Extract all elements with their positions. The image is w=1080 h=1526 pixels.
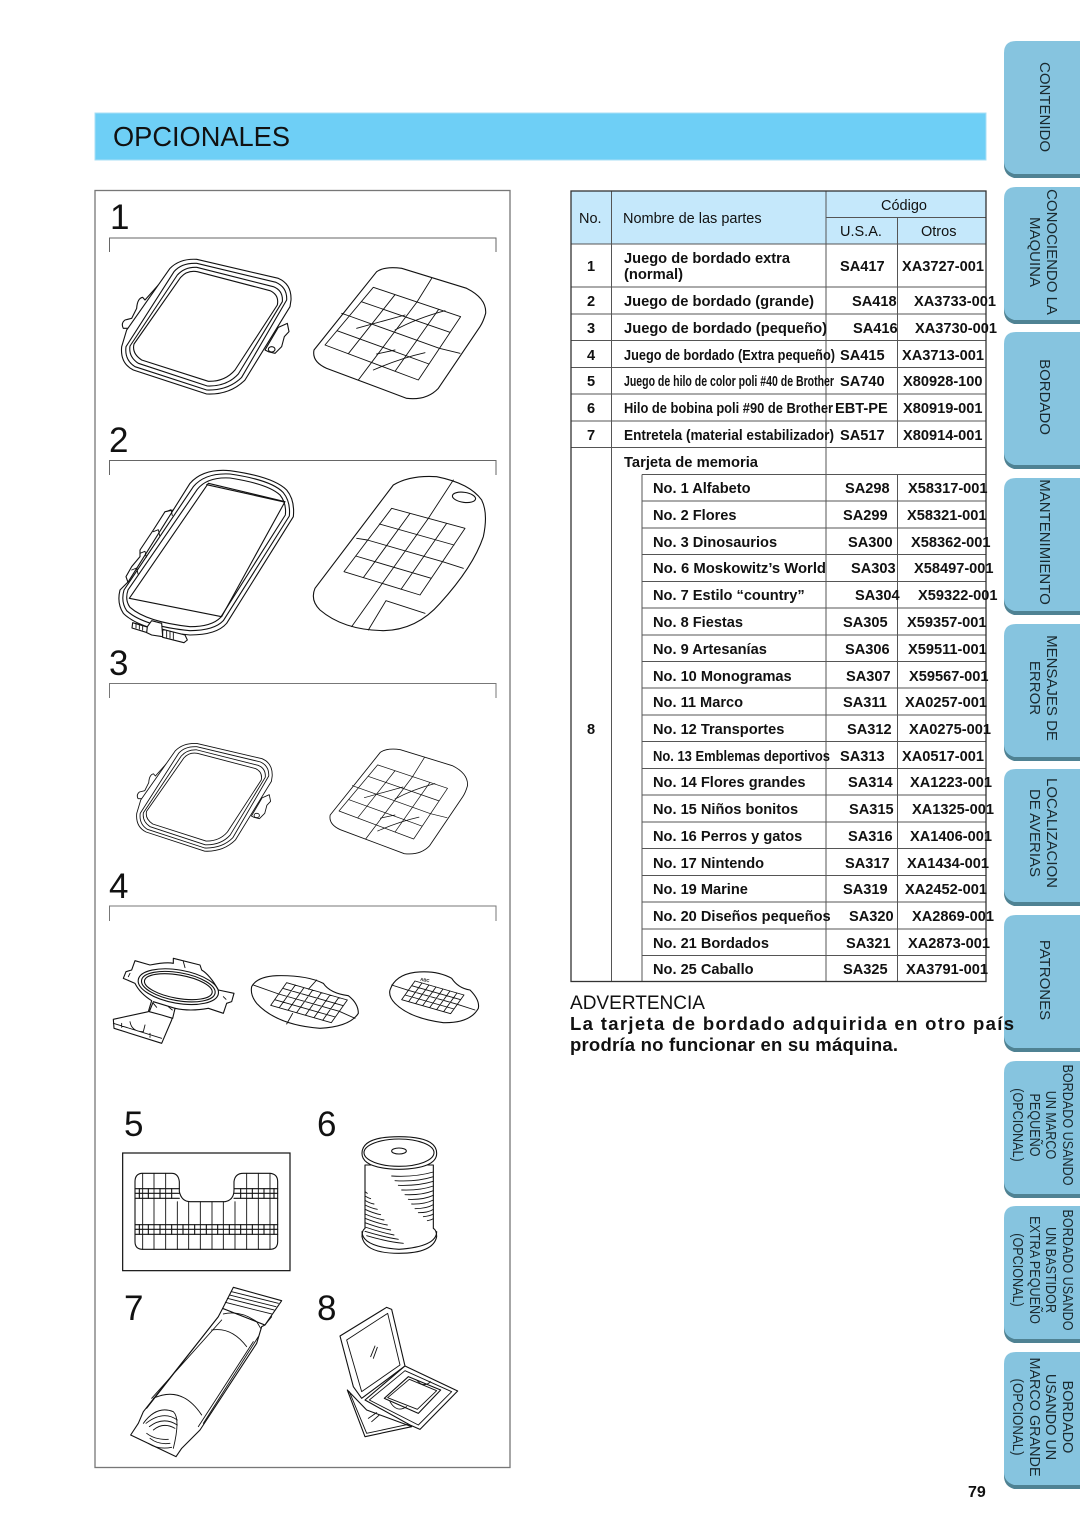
number 2: 2 <box>109 421 128 460</box>
table row 8: memory cards: SA311 <box>843 695 887 711</box>
table header text: Nombre de las partes <box>623 211 762 227</box>
table rows 1 to 7: XA3730-001 <box>915 321 997 337</box>
illustration: item 1 sheet <box>314 268 486 399</box>
illustration: item 1 hoop <box>121 259 291 394</box>
table row 8: memory cards: XA1223-001 <box>910 775 992 791</box>
bracket 2 <box>110 460 496 475</box>
table rows 1 to 7: X80919-001 <box>903 401 983 417</box>
table row 8: memory cards: X59322-001 <box>918 588 998 604</box>
table rows 1 to 7: 6 <box>587 401 595 417</box>
table rows 1 to 7: 5 <box>587 374 595 390</box>
tab: conociendo la maquina <box>1004 187 1080 324</box>
table row 8: memory cards: XA0517-001 <box>902 749 984 765</box>
illustration: item 3 hoop <box>137 743 272 851</box>
tab: mantenimiento <box>1004 478 1080 615</box>
warning block <box>570 992 1014 1055</box>
tab: bordado <box>1004 332 1080 469</box>
number 1: 1 <box>110 198 129 237</box>
table row 8: memory cards: No. 3 Dinosaurios <box>653 535 777 551</box>
table rows 1 to 7: XA3733-001 <box>914 294 996 310</box>
table rows 1 to 7: 1 <box>587 259 595 275</box>
illustration: item 4 small sheet <box>390 972 479 1023</box>
table row 8: memory cards: XA3791-001 <box>906 962 988 978</box>
table rows 1 to 7: Juego de bordado (Extra pequeño) <box>624 348 835 364</box>
table rows 1 to 7: Juego de bordado (pequeño) <box>624 321 827 337</box>
illustration: item 2 hoop <box>119 470 294 643</box>
tab: bordado usando un marco pequeno: BORDADO USANDO <box>1060 1064 1077 1186</box>
tab: bordado usando un marco pequeno: PEQUEÑO <box>1027 1094 1044 1157</box>
tab: bordado usando un marco grande: BORDADO <box>1059 1381 1075 1453</box>
warning heading: ADVERTENCIA <box>570 992 705 1014</box>
table row 8: memory cards: SA306 <box>845 642 890 658</box>
table row 8: memory cards: X59567-001 <box>909 669 989 685</box>
tab: bordado usando un bastidor extra pequeno: EXTRA PEQUEÑO <box>1027 1216 1044 1324</box>
tab: bordado usando un bastidor extra pequeno <box>1004 1206 1080 1343</box>
table row 8: memory cards: XA2873-001 <box>908 936 990 952</box>
table row 8: memory cards: SA298 <box>845 481 890 497</box>
table row 8: memory cards: SA312 <box>847 722 892 738</box>
table row 8: memory cards: XA1434-001 <box>907 856 989 872</box>
tab: patrones: PATRONES <box>1036 940 1053 1020</box>
table row 8: memory cards: SA299 <box>843 508 888 524</box>
table header text: U.S.A. <box>840 224 882 240</box>
table row 8: memory cards: X58321-001 <box>907 508 987 524</box>
table row 8: memory cards: SA319 <box>843 882 888 898</box>
table row 8: memory cards: No. 6 Moskowitz’s World <box>653 561 826 577</box>
tab: bordado: BORDADO <box>1036 359 1053 435</box>
table rows 1 to 7: Entretela (material estabilizador) <box>624 428 834 444</box>
tab: bordado usando un bastidor extra pequeno: UN BASTIDOR <box>1043 1227 1060 1313</box>
table row 8: memory cards: 8 <box>587 722 595 738</box>
table rows 1 to 7: 7 <box>587 428 595 444</box>
tab: patrones <box>1004 915 1080 1052</box>
bracket 3 <box>110 684 496 698</box>
table row 8: memory cards: No. 14 Flores grandes <box>653 775 805 791</box>
table header text: Código <box>881 198 927 214</box>
table row 8: memory cards: No. 8 Fiestas <box>653 615 743 631</box>
table rows 1 to 7: Hilo de bobina poli #90 de Brother <box>624 401 833 417</box>
table row 8: memory cards: SA300 <box>848 535 893 551</box>
number 5: 5 <box>124 1105 143 1144</box>
bracket 1 <box>110 238 496 252</box>
table rows 1 to 7: SA416 <box>853 321 898 337</box>
panel: parts illustrations <box>95 190 510 1468</box>
illustration: item 3 sheet <box>330 749 468 854</box>
tab: bordado usando un marco grande: (OPCIONAL) <box>1010 1379 1027 1455</box>
table row 8: memory cards: XA1325-001 <box>912 802 994 818</box>
table row 8: memory cards: XA2869-001 <box>912 909 994 925</box>
number 4: 4 <box>109 867 128 906</box>
table rows 1 to 7: SA415 <box>840 348 885 364</box>
table row 8: memory cards: X59511-001 <box>908 642 987 658</box>
table header text <box>579 198 956 240</box>
table row 8: memory cards: SA303 <box>851 561 896 577</box>
table row 8: memory cards: X59357-001 <box>907 615 987 631</box>
table outer border <box>571 191 986 982</box>
table row 8: memory cards: SA317 <box>845 856 890 872</box>
table row 8: memory cards: No. 11 Marco <box>653 695 743 711</box>
tab: bordado usando un marco pequeno: UN MARCO <box>1043 1091 1060 1159</box>
table row 8: memory cards: XA2452-001 <box>905 882 987 898</box>
table header background <box>571 191 986 244</box>
warning text: La tarjeta de bordado adquirida en otro país <box>570 1013 1014 1034</box>
table rows 1 to 7: 4 <box>587 348 596 364</box>
table header text: Otros <box>921 224 956 240</box>
tab: bordado usando un marco grande: MARCO GRANDE <box>1026 1357 1042 1477</box>
table row 8: memory cards: No. 9 Artesanías <box>653 642 767 658</box>
table row 8: memory cards: SA315 <box>849 802 894 818</box>
illustration: item 8 memory card case <box>340 1307 458 1437</box>
table row 8: memory cards: No. 25 Caballo <box>653 962 754 978</box>
table rows 1 to 7: Juego de bordado (grande) <box>624 294 814 310</box>
table row 8: memory cards: SA313 <box>840 749 885 765</box>
tab: bordado usando un marco grande <box>1004 1352 1080 1489</box>
number 6: 6 <box>317 1105 336 1144</box>
table row 8: memory cards: SA316 <box>848 829 893 845</box>
illustration: item 7 stabilizer <box>131 1287 282 1457</box>
illustration: item 4 small sheet: ABC <box>420 977 430 983</box>
table row 8: memory cards: No. 21 Bordados <box>653 936 769 952</box>
tab: mensajes de error: ERROR <box>1026 661 1043 715</box>
side tabs <box>1004 41 1080 1489</box>
table rows 1 to 7: SA517 <box>840 428 885 444</box>
table row 8: memory cards: No. 13 Emblemas deportivos <box>653 749 830 765</box>
illustration: item 4 large sheet <box>251 976 358 1028</box>
table row 8: memory cards: No. 15 Niños bonitos <box>653 802 798 818</box>
table row 8: memory cards: XA1406-001 <box>910 829 992 845</box>
table row 8: memory cards: No. 20 Diseños pequeños <box>653 909 831 925</box>
table header text: No. <box>579 211 602 227</box>
title bar: OPCIONALES <box>113 121 290 152</box>
illustration: item 5 thread chart <box>123 1153 290 1271</box>
tab: mensajes de error <box>1004 624 1080 761</box>
table rows 1 to 7: X80928-100 <box>903 374 983 390</box>
number 3: 3 <box>109 644 128 683</box>
table row 8: memory cards: No. 19 Marine <box>653 882 748 898</box>
table rows 1 to 7: Juego de hilo de color poli #40 de Brother <box>624 374 834 390</box>
tab: contenido: CONTENIDO <box>1036 62 1053 152</box>
number 8: 8 <box>317 1289 336 1328</box>
table row 8: memory cards: X58317-001 <box>908 481 988 497</box>
tab: localizacion de averias: LOCALIZACION <box>1043 778 1060 888</box>
table rows 1 to 7: 3 <box>587 321 595 337</box>
tab: conociendo la maquina: CONOCIENDO LA <box>1043 189 1060 315</box>
tab: bordado usando un marco pequeno: (OPCIONAL) <box>1010 1088 1027 1162</box>
table rows 1 to 7: SA418 <box>852 294 897 310</box>
tab: bordado usando un marco grande: USANDO UN <box>1042 1374 1058 1460</box>
table rows 1 to 7: SA740 <box>840 374 885 390</box>
warning text <box>570 1013 1014 1055</box>
tab: localizacion de averias <box>1004 769 1080 906</box>
table row 8: memory cards: XA0257-001 <box>905 695 987 711</box>
table row 8: memory cards: No. 16 Perros y gatos <box>653 829 802 845</box>
table row 8: memory cards: SA321 <box>846 936 891 952</box>
table rows 1 to 7: XA3727-001 <box>902 259 984 275</box>
illustration: item 6 spool <box>362 1137 437 1253</box>
number 7: 7 <box>124 1289 143 1328</box>
table row 8: memory cards: SA314 <box>848 775 894 791</box>
tab: mantenimiento: MANTENIMIENTO <box>1036 479 1053 605</box>
illustration: item 2 sheet <box>313 476 485 631</box>
tab: bordado usando un marco pequeno <box>1004 1061 1080 1198</box>
table rows 1 to 7: (normal) <box>624 267 683 283</box>
table rows 1 to 7: X80914-001 <box>903 428 983 444</box>
table rows 1 to 7: EBT-PE <box>835 401 888 417</box>
table rows 1 to 7 <box>587 251 997 444</box>
table row 8: memory cards: No. 2 Flores <box>653 508 737 524</box>
tab: contenido <box>1004 41 1080 178</box>
table row 8: memory cards: XA0275-001 <box>909 722 991 738</box>
bracket 4 <box>110 906 496 921</box>
table rows 1 to 7: SA417 <box>840 259 885 275</box>
table row 8: memory cards: No. 10 Monogramas <box>653 669 792 685</box>
table rows 1 to 7: XA3713-001 <box>902 348 984 364</box>
tab: conociendo la maquina: MAQUINA <box>1026 217 1043 287</box>
table row 8: memory cards: No. 17 Nintendo <box>653 856 764 872</box>
table grid <box>571 191 986 982</box>
table row 8: memory cards: X58497-001 <box>914 561 994 577</box>
table row 8: memory cards: Tarjeta de memoria <box>624 455 759 471</box>
table row 8: memory cards: No. 12 Transportes <box>653 722 784 738</box>
table rows 1 to 7: 2 <box>587 294 595 310</box>
illustration: item 4 hoop <box>113 958 234 1043</box>
table: parts and codes <box>571 191 998 982</box>
tab: mensajes de error: MENSAJES DE <box>1043 635 1060 741</box>
table row 8: memory cards: SA320 <box>849 909 894 925</box>
table row 8: memory cards: SA325 <box>843 962 888 978</box>
table row 8: memory cards: SA305 <box>843 615 888 631</box>
table row 8: memory cards: SA307 <box>846 669 891 685</box>
table row 8: memory cards: X58362-001 <box>911 535 991 551</box>
table row 8: memory cards: No. 1 Alfabeto <box>653 481 751 497</box>
table row 8: memory cards: No. 7 Estilo “country” <box>653 588 805 604</box>
table row 8: memory cards: SA304 <box>855 588 901 604</box>
table row 8: memory cards <box>587 455 998 978</box>
tab: bordado usando un bastidor extra pequeno: (OPCIONAL) <box>1010 1233 1027 1307</box>
table rows 1 to 7: Juego de bordado extra <box>624 251 791 267</box>
tab: bordado usando un bastidor extra pequeno: BORDADO USANDO <box>1060 1209 1077 1331</box>
title bar <box>95 113 986 160</box>
warning text: prodría no funcionar en su máquina. <box>570 1034 898 1055</box>
tab: localizacion de averias: DE AVERIAS <box>1026 789 1043 877</box>
page number: 79 <box>968 1484 986 1501</box>
